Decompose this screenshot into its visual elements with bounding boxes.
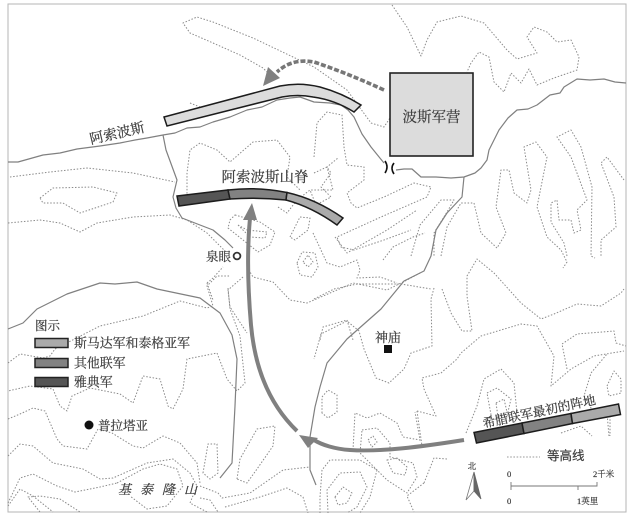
Greek ridge line bar xyxy=(177,189,343,225)
legend title: 图示 xyxy=(35,319,61,333)
Plataea xyxy=(84,418,149,433)
icon: spring xyxy=(206,250,240,264)
scale: 0 km: 0 xyxy=(507,469,511,479)
legend swatch: other allies xyxy=(35,358,68,368)
main advance arrow xyxy=(243,203,297,431)
scale: 2 km: 2千米 xyxy=(593,469,615,479)
label: Asopus river: 阿索波斯 xyxy=(88,120,146,148)
legend label: other allies: 其他联军 xyxy=(74,356,126,370)
label: north: 北 xyxy=(468,461,477,471)
legend swatch: Athenians xyxy=(35,378,68,386)
label: contour: 等高线 xyxy=(547,448,585,463)
contour legend xyxy=(507,448,585,463)
label: shrine: 神庙 xyxy=(375,330,401,345)
scale bar xyxy=(507,469,615,506)
legend swatch: Sparta and Tegea xyxy=(35,338,68,348)
label: Asopus ridge: 阿索波斯山脊 xyxy=(222,168,308,186)
label: Persian camp: 波斯军营 xyxy=(402,108,460,126)
river: western stream xyxy=(8,282,237,478)
initial Greek line bar xyxy=(474,404,620,443)
legend label: Athenians: 雅典军 xyxy=(74,374,113,390)
label: Plataea: 普拉塔亚 xyxy=(98,418,149,433)
label: Cithaeron mountains: 基泰隆山 xyxy=(118,482,206,497)
river: central tributary xyxy=(310,177,464,485)
north arrow xyxy=(466,461,481,500)
Persian line bar xyxy=(164,84,361,126)
river: Asopus main channel xyxy=(8,97,384,163)
label: initial Greek position: 希腊联军最初的阵地 xyxy=(481,392,597,431)
scale: 0 mile: 0 xyxy=(507,496,511,506)
river: tributary to the spring xyxy=(163,135,233,248)
arrow from initial position xyxy=(299,435,464,450)
scale: 1 mile: 1英里 xyxy=(577,496,599,506)
label: spring: 泉眼 xyxy=(206,250,232,264)
dashed Persian arrow xyxy=(263,61,384,90)
legend label: Sparta and Tegea: 斯马达军和泰格亚军 xyxy=(74,336,190,350)
bridge symbol xyxy=(385,161,394,174)
legend xyxy=(35,319,190,390)
shrine xyxy=(375,330,401,353)
Persian camp xyxy=(390,73,473,156)
